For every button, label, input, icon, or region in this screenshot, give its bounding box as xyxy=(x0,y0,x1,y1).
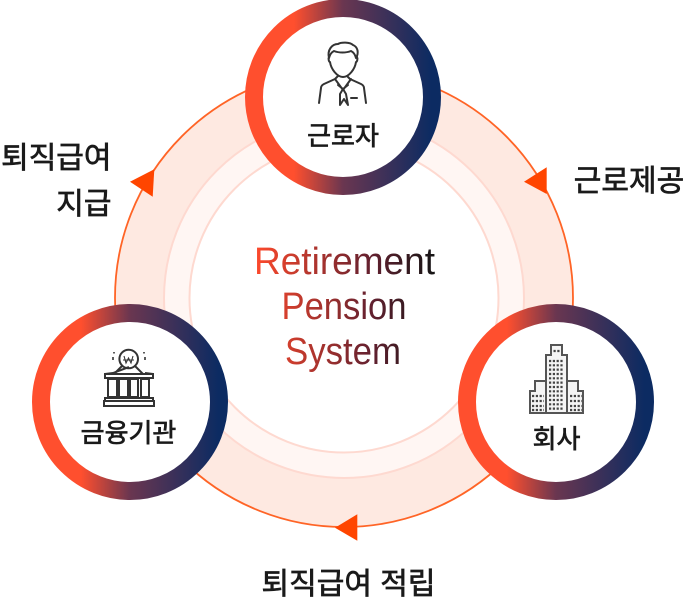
icon: buildings xyxy=(530,345,583,413)
arrow: to company xyxy=(524,167,547,194)
label: provide labor: 근로제공 xyxy=(574,165,684,198)
center title: Pension xyxy=(282,286,406,328)
arrow: to worker xyxy=(130,169,154,197)
label: retirement benefit payment: 지급 xyxy=(56,188,112,221)
label: retirement benefit payment xyxy=(1,142,112,221)
node: worker xyxy=(254,8,432,186)
center title: Retirement xyxy=(254,241,435,283)
arrow: to institution xyxy=(335,514,357,541)
label: retirement benefit payment: 퇴직급여 xyxy=(1,142,112,175)
label: company: 회사 xyxy=(533,424,580,454)
center title xyxy=(254,241,435,373)
label: retirement benefit accumulation: 퇴직급여 적립 xyxy=(262,568,435,601)
node: financial institution xyxy=(41,313,219,491)
node: company xyxy=(467,313,645,491)
icon: bank xyxy=(104,350,154,406)
label: financial institution: 금융기관 xyxy=(81,418,176,448)
icon: worker xyxy=(319,43,366,105)
outer orbit ring xyxy=(115,69,573,527)
label: worker: 근로자 xyxy=(307,121,379,151)
center title: System xyxy=(285,331,401,373)
